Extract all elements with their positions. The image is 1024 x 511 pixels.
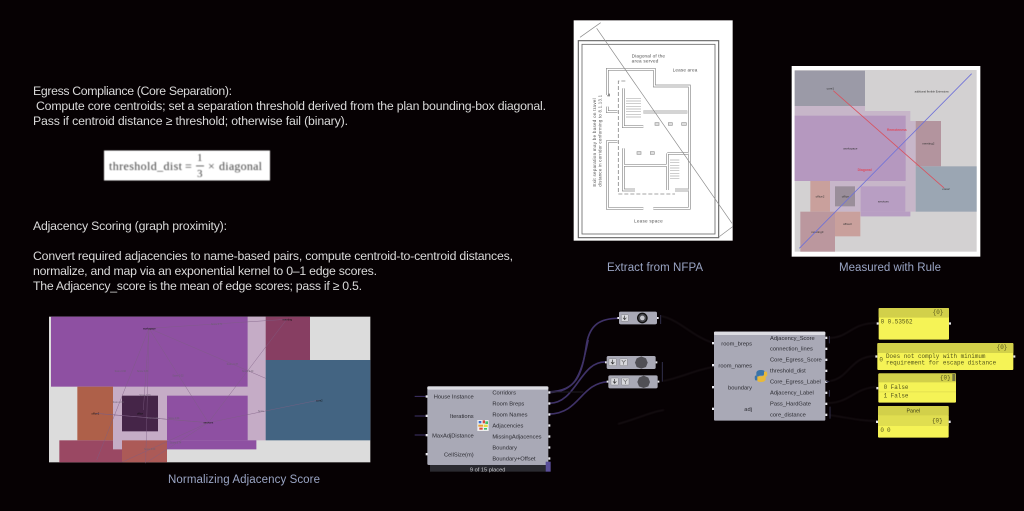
output labels: Adjacency_Label: [770, 391, 814, 397]
panel: core distance value: 0: [880, 427, 884, 434]
output labels: Room Names: [492, 413, 528, 419]
plan labels: distance in corridor conforming to 8.1.13.1: [597, 94, 602, 187]
panel: pass hard gate values: 1: [884, 393, 888, 400]
input labels: room_names: [718, 363, 752, 369]
room labels: office2: [816, 195, 825, 199]
output labels: Room Breps: [492, 402, 524, 408]
text block: adjacency scoring: Convert required adjacencies to name-based pairs, compute centroid-to-centroid distances,: [33, 249, 513, 263]
edge score labels: Score 0.61: [113, 401, 125, 404]
panel: egress message: requirement for escape distance: [886, 360, 997, 367]
plan labels: [592, 53, 698, 224]
room labels: meeting: [283, 317, 293, 321]
output labels: Core_Egress_Score: [770, 358, 822, 364]
panel: pass hard gate values: 0: [884, 384, 888, 391]
room labels: core2: [316, 398, 323, 402]
panel: egress message: {0}: [997, 344, 1007, 351]
output labels: Core_Egress_Label: [770, 380, 821, 386]
input labels: Iterations: [450, 414, 474, 420]
component: names param bottom: [607, 362, 662, 388]
panel: core distance value: Panel: [907, 409, 920, 415]
room labels: workspace: [143, 326, 156, 330]
adjacency edges: [95, 319, 319, 463]
caption: Normalizing Adjacency Score: Normalizing Adjacency Score: [168, 474, 320, 486]
panel: measured plan: [792, 66, 980, 257]
output labels: core_distance: [770, 413, 806, 419]
wires: faint dark connections: [618, 316, 878, 424]
plan labels: Exit separation may be based on travel: [592, 98, 597, 187]
diagonal line: [580, 23, 733, 237]
input labels: room_breps: [721, 341, 752, 347]
edge score labels: Score 0.52: [172, 374, 184, 377]
panel: pass hard gate values: [876, 373, 956, 403]
room labels: services: [878, 200, 889, 204]
rooms: [51, 317, 370, 462]
text block: adjacency scoring: [33, 219, 513, 293]
edge score labels: Score 0.91: [168, 417, 180, 420]
plan labels: Lease space: [634, 219, 663, 224]
component: names param top: [605, 356, 657, 369]
panel: adjacency score plan: [49, 317, 370, 463]
ports: [426, 391, 550, 460]
core floor plan: [607, 69, 689, 208]
edge score labels: Score 0.69: [144, 448, 156, 451]
formula: threshold distance: 3: [197, 168, 203, 180]
input labels: House Instance: [434, 395, 474, 401]
output labels: Boundary: [492, 445, 517, 451]
panel: NFPA plan extract: [574, 20, 733, 241]
output labels: connection_lines: [770, 347, 813, 353]
measure lines: [833, 91, 944, 188]
panel: adjacency score value: 0: [881, 319, 885, 326]
columns: [637, 123, 686, 154]
travel path: [618, 81, 675, 194]
circulation area: [113, 317, 266, 449]
formula: threshold distance: diagonal: [219, 159, 263, 173]
room labels: office: [842, 195, 849, 199]
ports: [712, 337, 827, 416]
circulation area: [795, 106, 916, 216]
output labels: Boundary+Offset: [492, 456, 536, 462]
edge score labels: Score 0.83: [137, 370, 149, 373]
room labels: core1: [827, 87, 834, 91]
panel: pass hard gate values: {0}: [940, 374, 951, 381]
output labels: MissingAdjacences: [492, 435, 542, 441]
stairs: [626, 98, 679, 179]
component: brep param: [617, 312, 661, 324]
output labels: [492, 391, 542, 462]
formula: threshold distance: 1: [197, 152, 202, 164]
edge score labels: Score: [258, 410, 265, 413]
text block: adjacency scoring: normalize, and map via an exponential kernel to 0–1 edge scores.: [33, 264, 377, 278]
room labels: additional flexible Extensions: [915, 90, 949, 94]
room labels: office: [137, 412, 144, 416]
text block: egress compliance: Egress Compliance (Core Separation):: [33, 84, 232, 98]
input labels: MaxAdjDistance: [432, 433, 474, 439]
room labels: meeting3: [811, 230, 824, 234]
panel: measured plan: Diagonal: [858, 168, 872, 172]
text block: egress compliance: Pass if centroid distance ≥ threshold; otherwise fail (binary).: [33, 114, 348, 128]
panel: adjacency score value: {0}: [933, 309, 943, 316]
formula: threshold distance: [104, 150, 270, 180]
formula: threshold distance: =: [185, 159, 192, 173]
component: house layout solver: [426, 386, 551, 473]
component: house layout solver: 9 of 15 placed: [470, 467, 505, 473]
formula: threshold distance: ×: [208, 159, 215, 173]
building outline: [578, 41, 719, 238]
input labels: [432, 395, 474, 458]
icon: python logo: [755, 370, 767, 382]
panel: adjacency score value: 0.53562: [888, 319, 913, 326]
output labels: Corridors: [492, 391, 516, 397]
panel: core distance value: [876, 406, 951, 438]
room labels: workspace: [843, 147, 858, 151]
input labels: boundary: [728, 385, 752, 391]
edge score labels: Score 0.71: [211, 323, 223, 326]
edge score labels: Score 0.66: [115, 370, 127, 373]
edge score labels: Score 0.74: [170, 441, 182, 444]
icon: layout grid: [477, 420, 489, 431]
edge score labels: Score 0.79: [139, 394, 151, 397]
edge score labels: [113, 323, 265, 451]
input labels: [718, 341, 752, 413]
panel: adjacency score value: [877, 308, 951, 340]
output labels: Adjacency_Score: [770, 336, 815, 342]
panel: core distance value: 0: [887, 427, 891, 434]
edge score labels: Score 0.40: [242, 370, 254, 373]
panel: egress message: 0: [879, 356, 883, 363]
panel: egress message: Does not comply with minimum: [886, 353, 986, 360]
panel: pass hard gate values: False: [891, 393, 909, 400]
input labels: CellSize(m): [444, 452, 474, 458]
status bar: [430, 465, 546, 472]
room labels: [811, 87, 950, 234]
panel: egress message: [875, 343, 1015, 370]
output labels: Adjacencies: [492, 424, 523, 430]
room labels: meeting2: [922, 142, 935, 146]
edge score labels: Score 0.88: [147, 417, 159, 420]
edge score labels: Score 0.37: [227, 363, 239, 366]
room labels: [91, 317, 323, 425]
text block: egress compliance: Compute core centroids; set a separation threshold derived from the plan bounding-box diagonal.: [36, 99, 546, 113]
output labels: threshold_dist: [770, 369, 806, 375]
component: python script: [712, 332, 830, 421]
caption: Measured with Rule: Measured with Rule: [839, 262, 941, 274]
room labels: core2: [942, 187, 950, 191]
panel: measured plan: Remoteness: [887, 128, 907, 132]
output labels: [770, 336, 822, 419]
text block: egress compliance: [33, 84, 546, 128]
plan labels: Lease area: [673, 67, 698, 72]
caption: Extract from NFPA: Extract from NFPA: [607, 262, 703, 274]
panel: pass hard gate values: False: [891, 384, 909, 391]
plan labels: Diagonal of the: [632, 53, 665, 58]
room labels: office2: [91, 411, 100, 415]
wires: grasshopper purple connections: [415, 318, 618, 435]
rooms: [795, 71, 977, 252]
plan labels: area served: [632, 59, 659, 64]
input labels: adj: [744, 407, 752, 413]
panel: core distance value: {0}: [932, 417, 943, 424]
room labels: services: [203, 421, 214, 425]
formula: threshold distance: threshold_dist: [109, 159, 183, 173]
text block: adjacency scoring: Adjacency Scoring (graph proximity):: [33, 219, 227, 233]
text block: adjacency scoring: The Adjacency_score is the mean of edge scores; pass if ≥ 0.5.: [33, 279, 362, 293]
room labels: office3: [843, 222, 852, 226]
output labels: Pass_HardGate: [770, 402, 811, 408]
